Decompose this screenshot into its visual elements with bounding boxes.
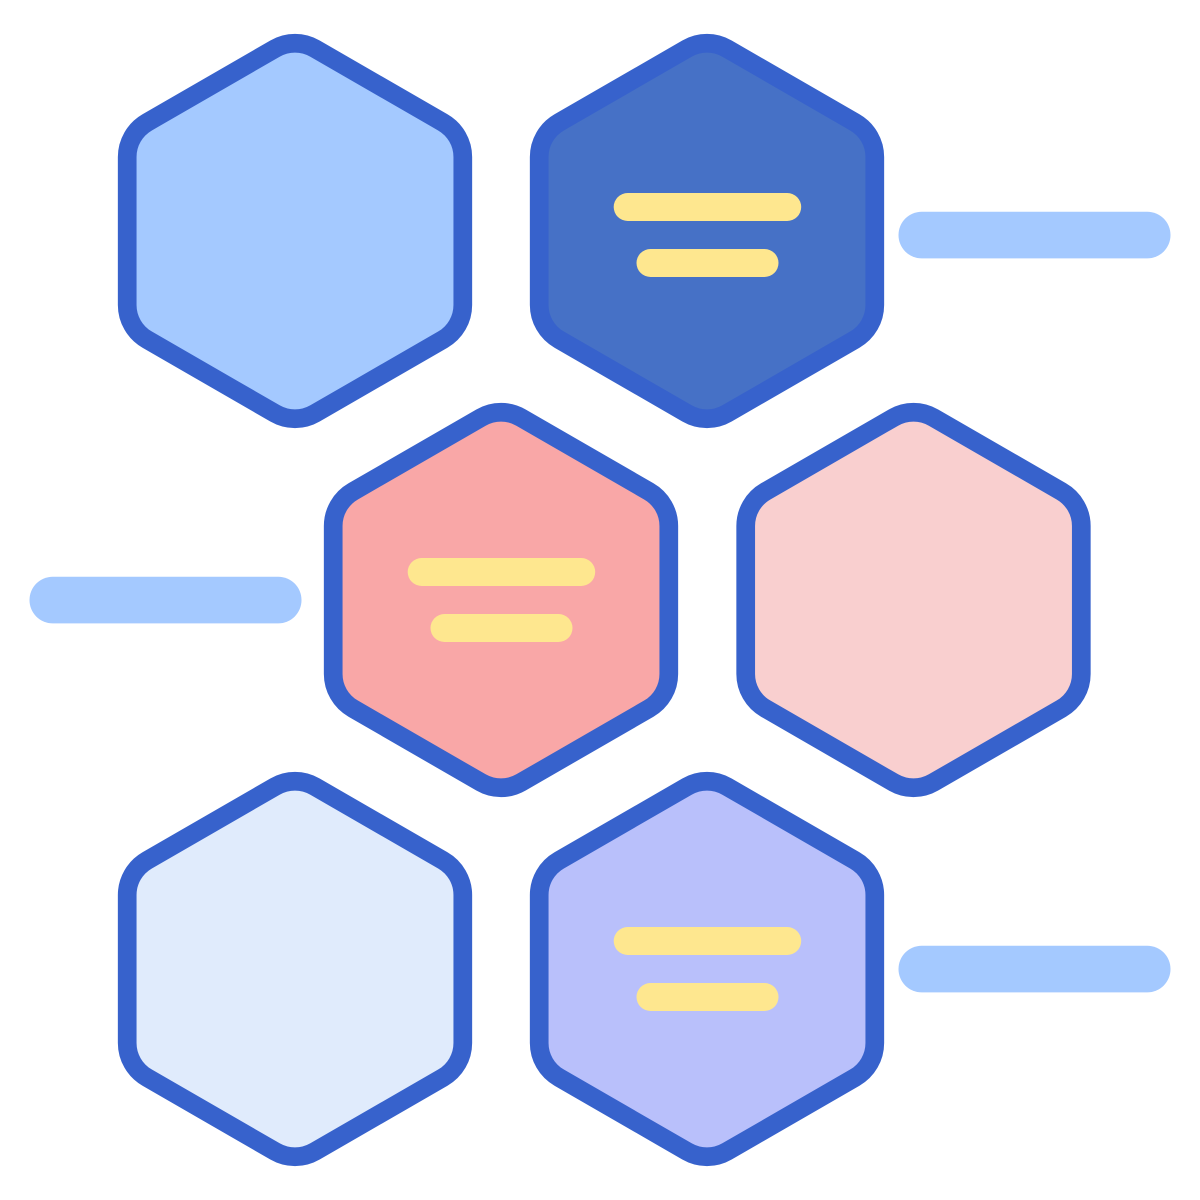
hexagon: middle right, pale pink: [746, 412, 1081, 788]
hexagon: bottom left, pale blue: [127, 781, 463, 1157]
hexagon: middle left, red with text lines: [333, 412, 669, 788]
label bar: bottom right: [898, 946, 1170, 992]
hexagon: bottom right, lavender with text lines: [539, 781, 875, 1157]
label bar: top right: [898, 212, 1170, 258]
hexagon: top right, dark blue with text lines: [539, 43, 875, 419]
label bar: middle left: [30, 577, 302, 623]
hexagon: top left, light blue: [127, 43, 463, 419]
